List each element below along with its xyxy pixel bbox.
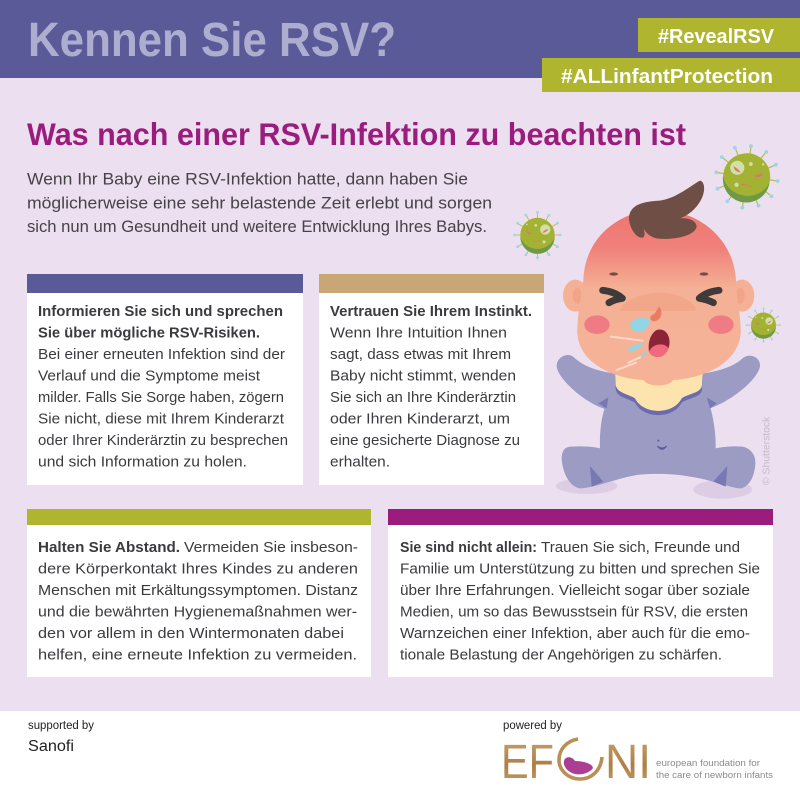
body (562, 373, 755, 488)
icon: virus small (746, 308, 781, 343)
hashtag: RevealRSV (638, 18, 800, 52)
panel: informieren: Sie über mögliche RSV-Risiken. (38, 324, 260, 342)
panel: nicht allein: Medien, um so das Bewusstsein für RSV, die ersten (400, 604, 748, 620)
panel: instinkt: erhalten. (330, 454, 390, 470)
powered by: powered by (503, 720, 562, 732)
hair (629, 181, 704, 239)
panel: abstand: und die bewährten Hygienemaßnahmen wer- (38, 604, 357, 620)
icon: virus large (710, 140, 784, 214)
mouth (649, 330, 670, 357)
panel: abstand: dere Körperkontakt Ihres Kindes zu anderen (38, 560, 358, 578)
copyright: © Shutterstock (761, 417, 772, 485)
panel: instinkt: Wenn Ihre Intuition Ihnen (330, 324, 507, 342)
panel: instinkt: Baby nicht stimmt, wenden (330, 368, 516, 384)
snot and sneeze (631, 318, 650, 332)
intro text: sich nun um Gesundheit und weitere Entwicklung Ihres Babys. (27, 217, 487, 236)
panel: informieren: und sich Information zu holen. (38, 454, 247, 470)
panel: instinkt: sagt, dass etwas mit Ihrem (330, 346, 511, 363)
ears (563, 280, 588, 312)
panel: nicht allein: Sie sind nicht allein: (400, 539, 537, 556)
title: Kennen Sie RSV? (28, 14, 396, 67)
panel: instinkt: Vertrauen Sie Ihrem Instinkt. (330, 303, 532, 320)
logo: EFCNI: NI (605, 736, 651, 789)
supported by: supported by (28, 720, 94, 732)
logo: EFCNI: the care of newborn infants (656, 770, 773, 781)
panel: nicht allein: tionale Belastung der Angehörigen zu schärfen. (400, 646, 722, 664)
panel: instinkt: oder Ihren Kinderarzt, um (330, 410, 510, 428)
cheeks (584, 315, 610, 334)
logo: EFCNI: european foundation for (656, 758, 761, 769)
main heading: Was nach einer RSV-Infektion zu beachten ist (27, 116, 686, 152)
intro text: Wenn Ihr Baby eine RSV-Infektion hatte, dann haben Sie (27, 170, 468, 188)
panel: nicht allein: Trauen Sie sich, Freunde und (541, 539, 740, 556)
intro text: möglicherweise eine sehr belastende Zeit erlebt und sorgen (27, 194, 492, 212)
illustration: crying baby (556, 181, 772, 499)
panel: abstand: Menschen mit Erkältungssymptomen. Distanz (38, 582, 358, 599)
logo: EFCNI (501, 736, 773, 789)
panel: informieren: Verlauf und die Symptome meist (38, 368, 261, 384)
supported by (28, 720, 94, 755)
hashtag: RevealRSV: #RevealRSV (658, 26, 775, 48)
intro text (27, 170, 492, 236)
hashtag: ALLinfantProtection: #ALLinfantProtection (561, 66, 773, 88)
footer band (0, 711, 800, 800)
header band (0, 0, 800, 78)
panel: abstand: Halten Sie Abstand. (38, 539, 180, 556)
panel: instinkt (319, 274, 544, 485)
arms (557, 355, 760, 417)
panel: nicht allein: Warnzeichen einer Infektion, aber auch für die emo- (400, 625, 750, 642)
panel: informieren: oder Ihrer Kinderärztin zu besprechen (38, 432, 288, 449)
logo: EFCNI: EF (501, 736, 554, 789)
panel: nicht allein: Familie um Unterstützung zu bitten und sprechen Sie (400, 560, 760, 578)
panel: abstand: helfen, eine erneute Infektion zu vermeiden. (38, 646, 357, 664)
panel: nicht allein: über Ihre Erfahrungen. Vielleicht sogar über soziale (400, 582, 750, 599)
nose (650, 307, 661, 321)
panel: abstand (27, 509, 371, 677)
panel: informieren: Informieren Sie sich und sprechen (38, 303, 283, 320)
panel: informieren: Bei einer erneuten Infektion sind der (38, 346, 285, 363)
panel: informieren: milder. Falls Sie Sorge haben, zögern (38, 389, 284, 406)
icon: virus medium (513, 211, 561, 259)
panel: abstand: Vermeiden Sie insbeson- (184, 539, 358, 556)
panel: informieren: Sie nicht, diese mit Ihrem Kinderarzt (38, 410, 285, 428)
panel: informieren (27, 274, 303, 485)
bib (615, 376, 703, 415)
head (577, 210, 741, 385)
panel: instinkt: eine gesicherte Diagnose zu (330, 432, 520, 449)
panel: abstand: den vor allem in den Wintermonaten dabei (38, 625, 344, 642)
supported by: Sanofi (28, 738, 74, 755)
panel: nicht allein (388, 509, 773, 677)
eyes (603, 290, 719, 303)
hashtag: ALLinfantProtection (542, 58, 800, 92)
panel: instinkt: Sie sich an Ihre Kinderärztin (330, 389, 516, 406)
